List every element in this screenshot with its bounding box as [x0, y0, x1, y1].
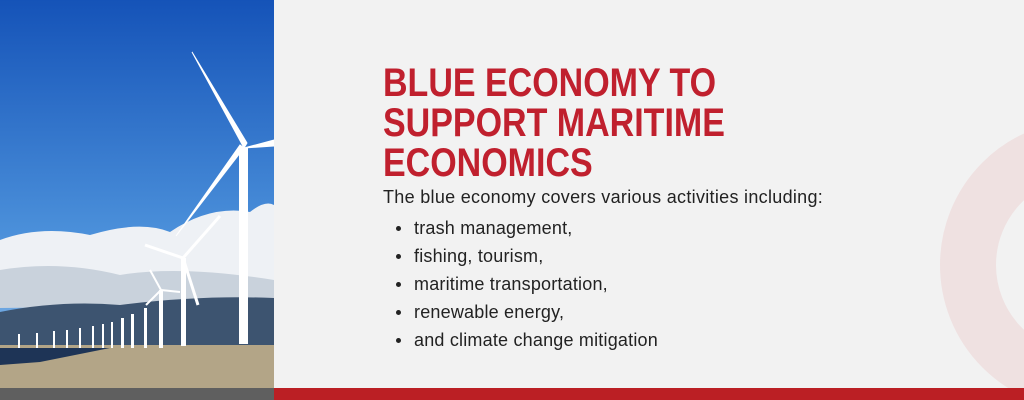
intro text: The blue economy covers various activities including: — [383, 187, 823, 207]
photo: wind turbines on beach — [0, 0, 274, 388]
bullet list: and climate change mitigation — [414, 330, 658, 350]
title: BLUE ECONOMY TO — [383, 61, 716, 105]
title: SUPPORT MARITIME — [383, 101, 725, 145]
bottom bar grey — [0, 388, 274, 400]
title — [383, 61, 725, 185]
bullet list: maritime transportation, — [414, 274, 608, 294]
bullet list — [396, 218, 658, 350]
bullet list: renewable energy, — [414, 302, 564, 322]
bullet list: trash management, — [414, 218, 572, 238]
turbines — [18, 52, 274, 348]
bullet list: fishing, tourism, — [414, 246, 543, 266]
title: ECONOMICS — [383, 141, 593, 185]
bottom bar red — [274, 388, 1024, 400]
